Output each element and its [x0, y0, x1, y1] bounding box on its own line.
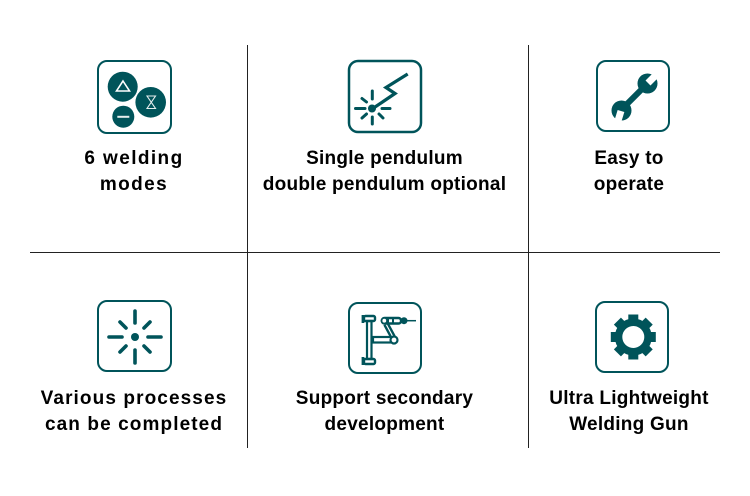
icon: wrench: [597, 61, 669, 131]
label: 6 welding modes: modes: [100, 174, 168, 195]
label: easy to operate: Easy to: [594, 148, 664, 169]
label: secondary development: [296, 388, 473, 435]
label: various processes: [40, 388, 227, 435]
label: single pendulum: double pendulum optional: [263, 174, 506, 195]
icon: gear: [596, 302, 668, 372]
icon: welding modes: [98, 61, 171, 133]
icon: process spark: [98, 301, 171, 371]
label: 6 welding modes: 6 welding: [84, 148, 184, 169]
label: ultra lightweight gun: [549, 388, 709, 435]
label: single pendulum: Single pendulum: [306, 148, 463, 169]
label: various processes: Various processes: [41, 388, 227, 409]
label: ultra lightweight gun: Welding Gun: [569, 414, 689, 435]
label: easy to operate: operate: [594, 174, 664, 195]
label: various processes: can be completed: [45, 414, 223, 435]
label: single pendulum: [263, 148, 506, 195]
label: secondary development: development: [325, 414, 444, 435]
label: secondary development: Support secondary: [296, 388, 473, 409]
label: easy to operate: [594, 148, 664, 195]
icon: welding torch with sparks: [349, 61, 421, 132]
label: 6 welding modes: [84, 148, 184, 195]
icon: robot arm: [349, 303, 421, 373]
label: ultra lightweight gun: Ultra Lightweight: [549, 388, 709, 409]
